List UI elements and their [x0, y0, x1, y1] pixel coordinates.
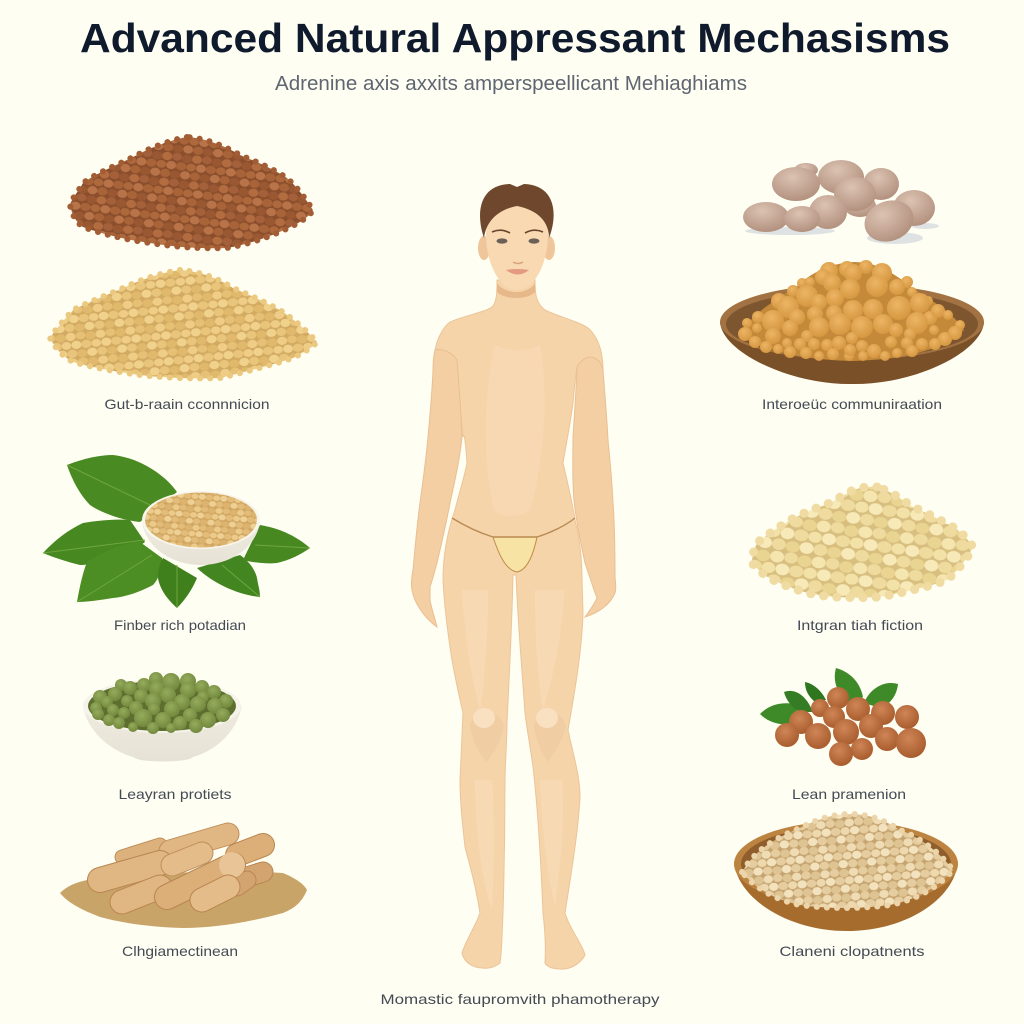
legumes	[742, 814, 953, 908]
food: beige grain pile	[50, 270, 317, 378]
food: leaves with grain bowl	[43, 455, 310, 608]
right kneecap	[536, 708, 558, 728]
bowl grains	[145, 492, 257, 548]
bowl rim	[83, 679, 241, 733]
bowl rim	[720, 284, 984, 360]
figure: human body mannequin	[411, 184, 616, 969]
food: red-brown nuts with leaves	[760, 668, 926, 766]
neck shadow	[497, 283, 535, 298]
label: capsules: Clhgiamectinean	[122, 943, 238, 959]
leaves	[760, 668, 898, 724]
label: gut-brain connection: Gut-b-raain cconnnicion	[104, 396, 270, 412]
face features	[492, 230, 543, 274]
food: mauve stones	[743, 160, 939, 248]
ears	[478, 236, 555, 260]
capsules	[100, 834, 263, 902]
stone shadows	[745, 223, 939, 244]
bowl outer	[720, 322, 984, 384]
bowl shadow interior	[88, 681, 236, 731]
label: legume proteins: Leayran protiets	[118, 786, 232, 802]
food: brown lentil pile	[70, 137, 313, 248]
bowl outer	[734, 862, 958, 931]
label: lean protein: Lean pramenion	[792, 786, 906, 802]
powder base	[60, 872, 307, 928]
waist cord	[452, 518, 575, 537]
leaf veins	[43, 465, 310, 608]
label: integrated fiction: Intgran tiah fiction	[797, 617, 923, 633]
leg highlights	[462, 590, 564, 910]
torso highlight	[486, 345, 545, 516]
stones	[743, 160, 935, 248]
hair	[480, 184, 554, 238]
footer caption: Momastic faupromvith phamotherapy	[380, 991, 660, 1007]
mound base	[740, 262, 964, 361]
subtitle: Adrenine axis axxits amperspeellicant Mehiaghiams	[275, 73, 747, 95]
left knee	[470, 712, 504, 762]
right arm	[573, 357, 616, 617]
neck and torso and legs	[435, 280, 603, 969]
food: capsules on powder	[60, 834, 307, 928]
food: beige legumes in wooden bowl	[734, 814, 958, 931]
bowl inner	[741, 826, 951, 902]
right knee	[534, 712, 566, 762]
left kneecap	[473, 708, 495, 728]
food: orange legumes in wooden bowl	[720, 260, 984, 384]
legumes	[738, 260, 965, 361]
icon: green leaves	[43, 455, 310, 608]
bowl body	[83, 706, 242, 762]
icon: white bowl	[142, 522, 260, 565]
nuts	[775, 687, 926, 766]
title: Advanced Natural Appressant Mechasisms	[80, 15, 950, 61]
label: clinical components: Claneni clopatnents	[780, 943, 924, 959]
bowl rim	[734, 821, 958, 907]
left arm	[411, 349, 462, 627]
label: interoceptive communication: Interoeüc communiraation	[762, 396, 942, 412]
head	[486, 205, 548, 290]
bowl inner	[726, 290, 978, 358]
food: cream bean pile	[752, 487, 973, 598]
label: fiber rich: Finber rich potadian	[114, 617, 246, 633]
bowl rim	[142, 491, 260, 549]
food: green legumes bowl	[83, 672, 242, 762]
green peas	[90, 672, 233, 734]
garment	[493, 537, 537, 572]
